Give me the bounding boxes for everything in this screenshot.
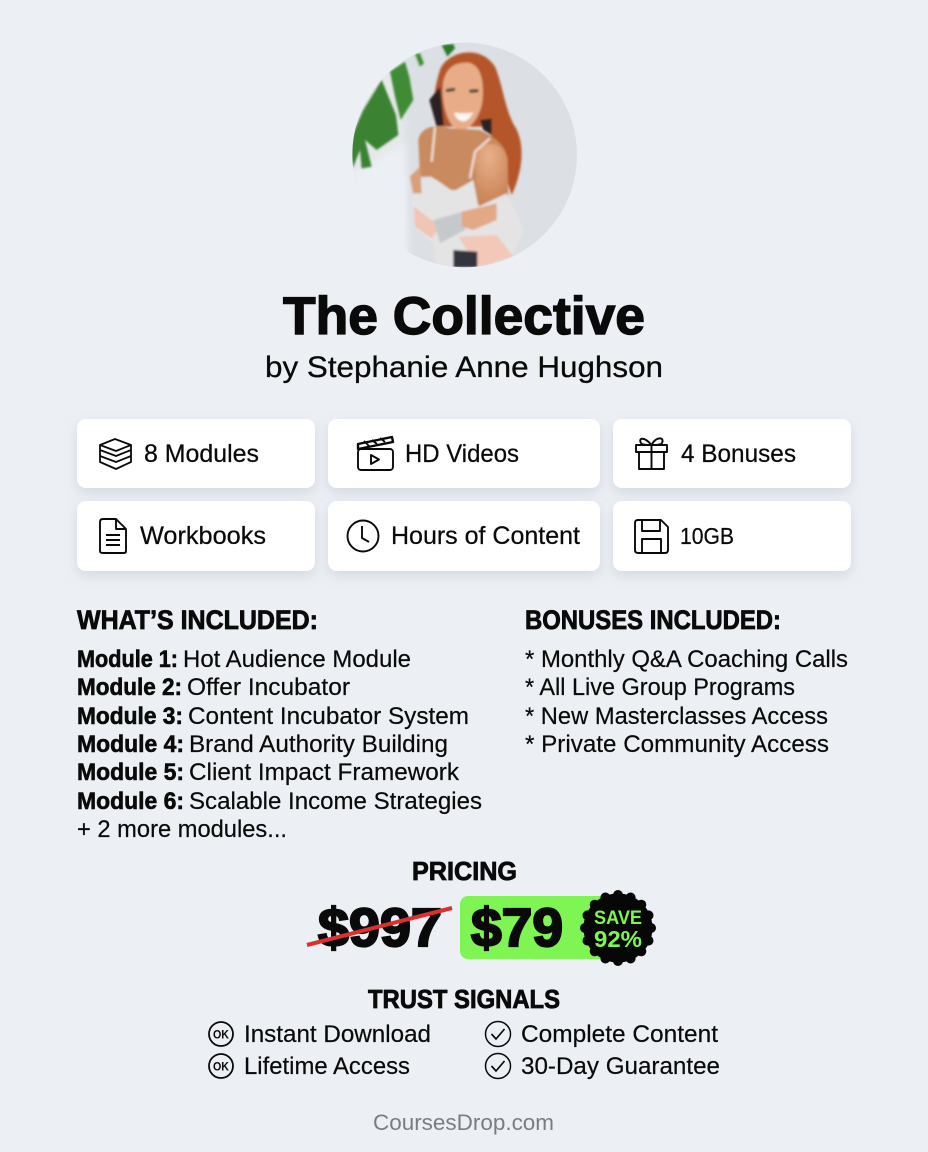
module list: + 2 more modules...	[77, 816, 287, 843]
module list: Module 4:	[77, 731, 184, 758]
stat card: Workbooks	[77, 501, 315, 571]
footer site name: CoursesDrop.com	[373, 1110, 554, 1135]
new price tag	[460, 896, 610, 959]
module list: Module 2:	[77, 674, 182, 701]
stat card: HD Videos: HD Videos	[405, 440, 519, 468]
badge: save 92%	[580, 890, 656, 966]
module list: Brand Authority Building	[189, 731, 448, 758]
trust item: lifetime access: Lifetime Access	[244, 1053, 410, 1080]
stat card: Hours of Content	[328, 501, 600, 571]
trust item: instant download: OK	[213, 1028, 229, 1042]
stat card: Workbooks: Workbooks	[140, 522, 266, 550]
heading: bonuses included: BONUSES INCLUDED:	[525, 605, 781, 635]
stat card: 4 Bonuses: 4 Bonuses	[681, 440, 796, 468]
module list: Module 3:	[77, 703, 183, 730]
portrait photo	[350, 40, 580, 270]
icon: document	[100, 519, 126, 553]
bonus list: * Private Community Access	[525, 731, 829, 758]
module list: Hot Audience Module	[183, 646, 411, 673]
module list: Module 1:	[77, 646, 178, 673]
stat card: 8 Modules: 8 Modules	[144, 440, 259, 468]
stat card: 10GB: 10GB	[680, 523, 734, 549]
bonus list: * New Masterclasses Access	[525, 703, 828, 730]
module list: Offer Incubator	[187, 674, 350, 701]
icon: clock	[348, 520, 378, 552]
module list: Module 5:	[77, 759, 184, 786]
icon: floppy disk	[635, 520, 668, 553]
module list	[77, 646, 482, 843]
module list: Scalable Income Strategies	[189, 788, 482, 815]
stat card: 4 Bonuses	[613, 419, 851, 488]
trust item: complete content: Complete Content	[521, 1021, 718, 1048]
trust item: 30-day guarantee: 30-Day Guarantee	[521, 1053, 720, 1080]
old price with strikethrough: $997	[318, 898, 442, 958]
icon: clapperboard	[358, 437, 393, 470]
stat card: HD Videos	[328, 419, 600, 488]
trust item: lifetime access: OK	[213, 1060, 229, 1074]
trust item: instant download: Instant Download	[244, 1021, 431, 1048]
stat card: 10GB	[613, 501, 851, 571]
stat card: 8 Modules	[77, 419, 315, 488]
module list: Content Incubator System	[188, 703, 469, 730]
module list: Module 6:	[77, 788, 184, 815]
stat card: Hours of Content: Hours of Content	[391, 522, 580, 550]
heading: trust signals: TRUST SIGNALS	[368, 984, 560, 1014]
bonus list	[525, 646, 848, 758]
badge: save 92%: 92%	[594, 926, 642, 952]
icon: gift	[636, 438, 667, 469]
bonus list: * All Live Group Programs	[525, 674, 795, 701]
bonus list: * Monthly Q&A Coaching Calls	[525, 646, 848, 673]
title: The Collective	[283, 287, 645, 346]
new price tag: $79	[471, 898, 563, 958]
subtitle: by Stephanie Anne Hughson	[265, 351, 663, 384]
module list: Client Impact Framework	[189, 759, 460, 786]
icon: books	[100, 439, 131, 469]
heading: what's included: WHAT’S INCLUDED:	[77, 605, 318, 635]
heading: pricing: PRICING	[412, 856, 517, 886]
badge: save 92%: SAVE	[594, 907, 642, 929]
